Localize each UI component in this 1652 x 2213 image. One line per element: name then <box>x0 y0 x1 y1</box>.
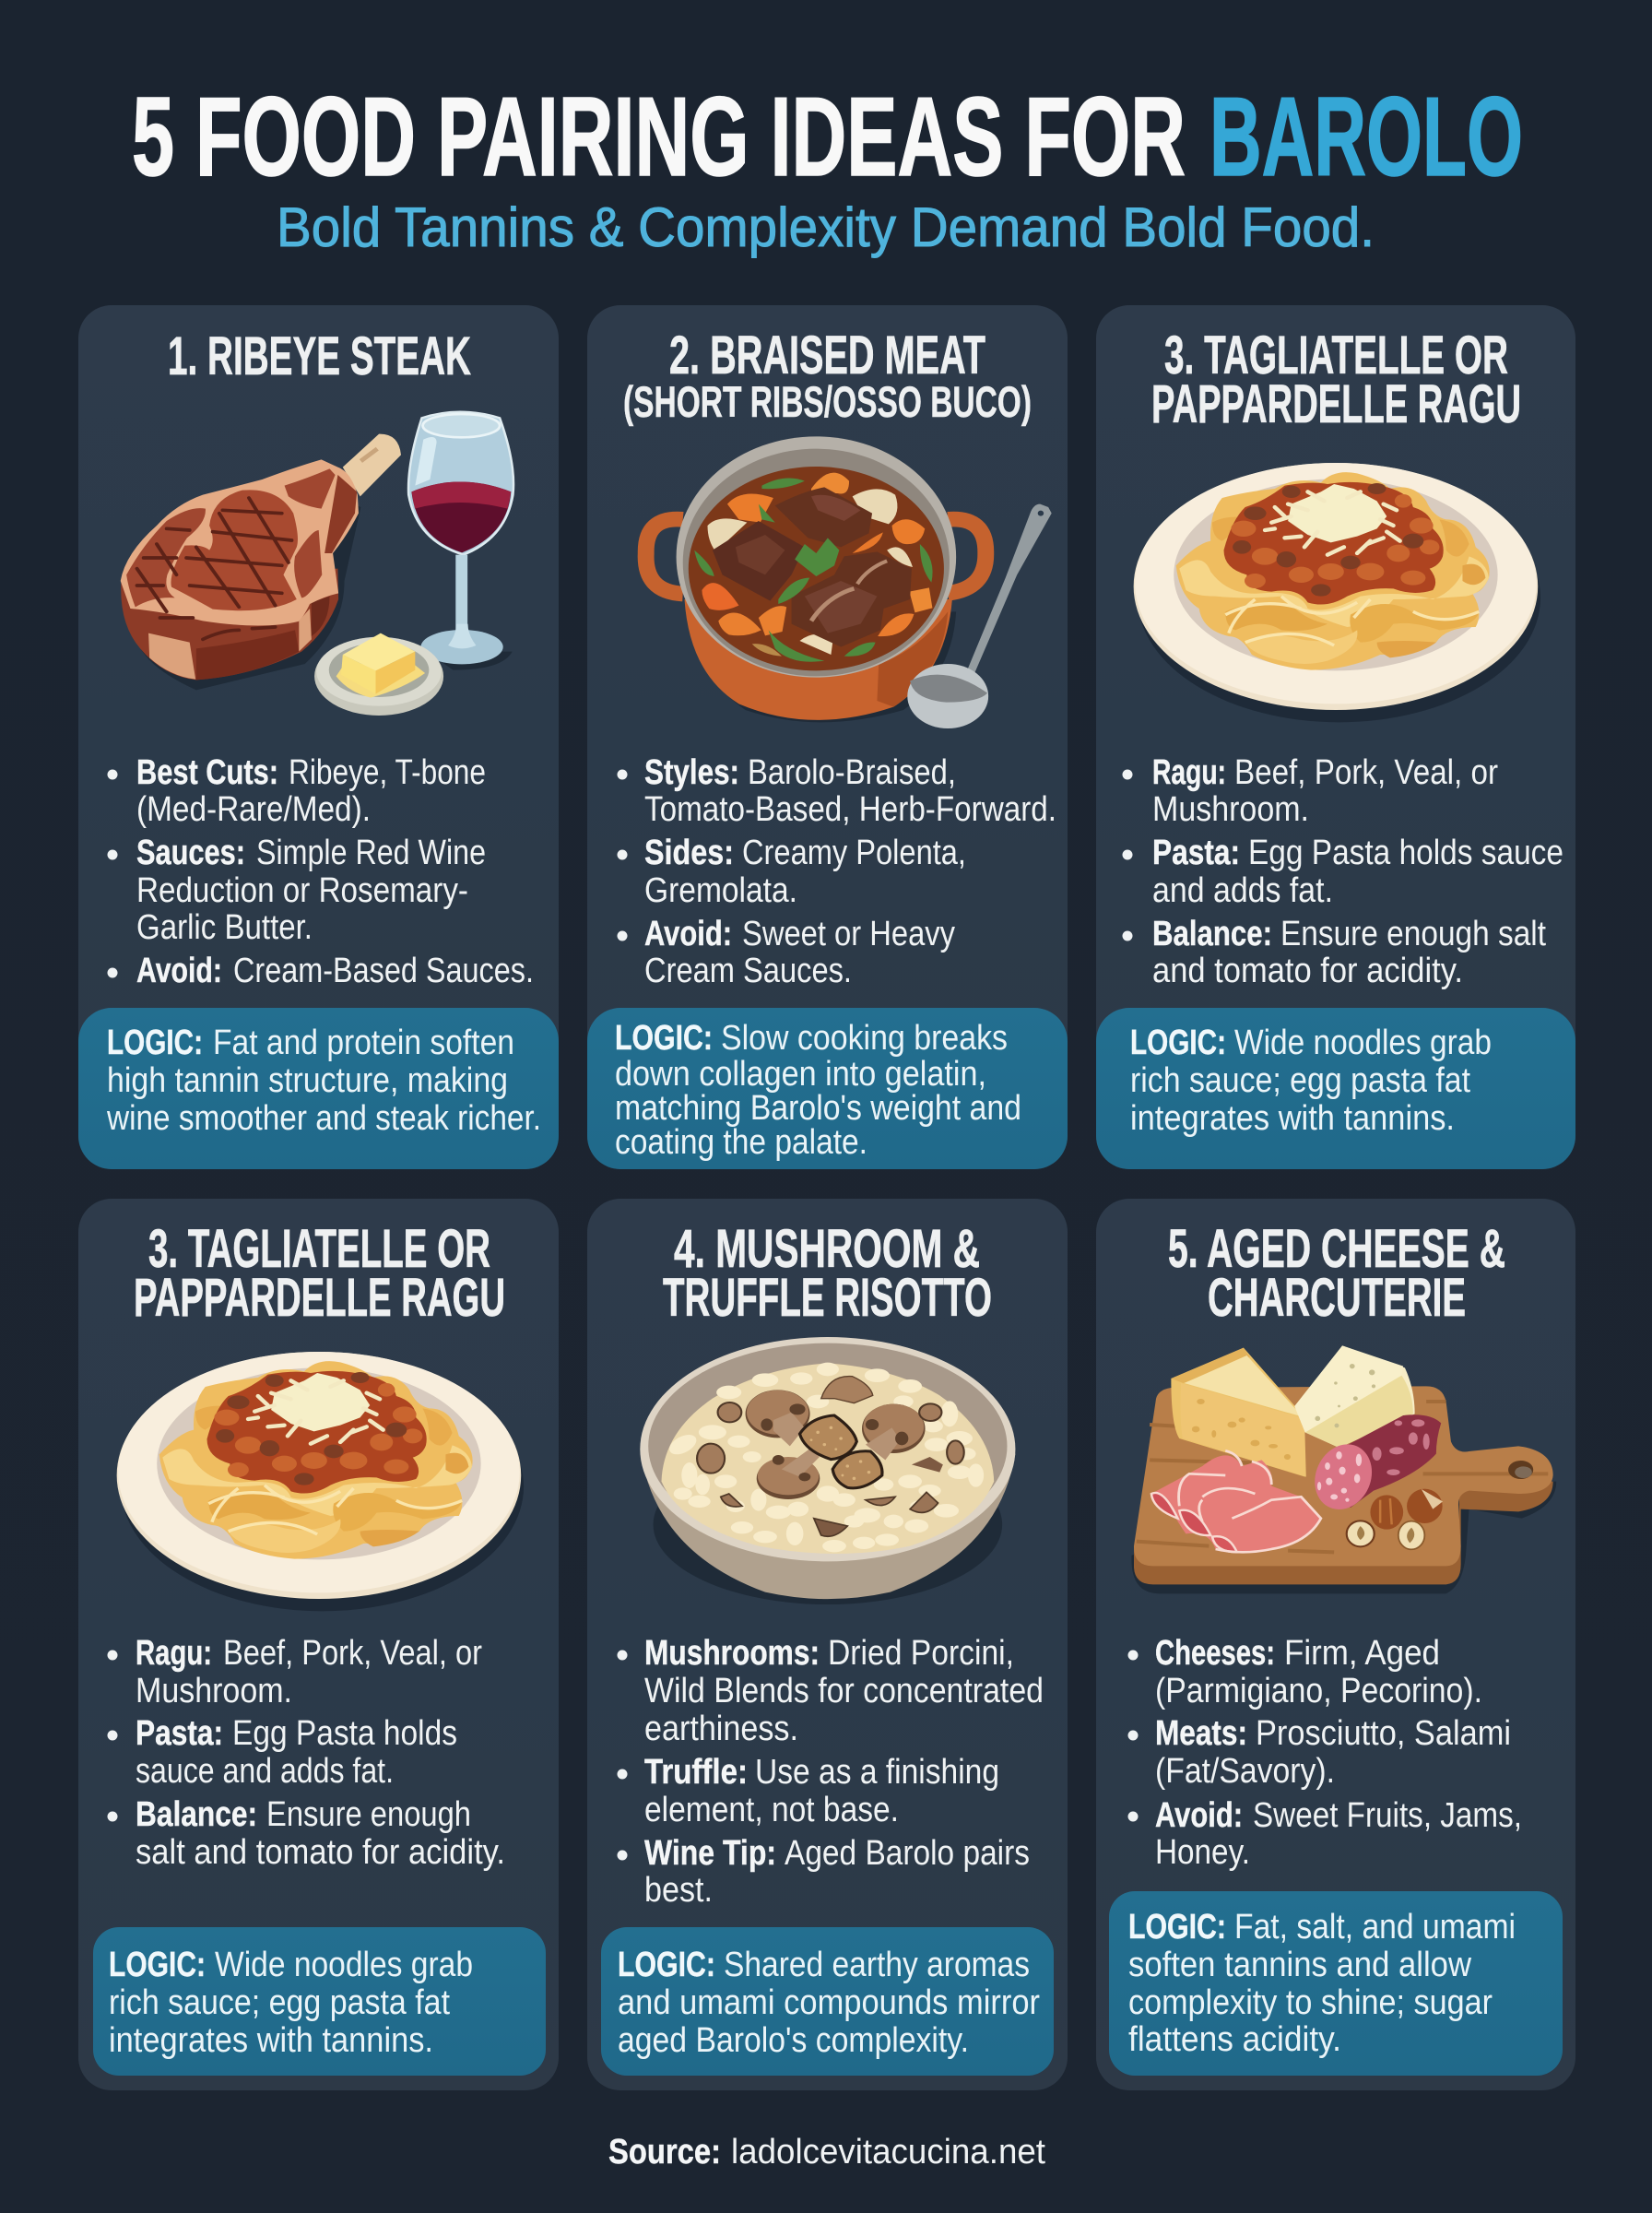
bullet list: ragu: and tomato for acidity. <box>1152 952 1463 990</box>
title: 5 FOOD PAIRING IDEAS FOR <box>132 74 1186 199</box>
bullet list: cheese: Firm, Aged <box>1284 1634 1440 1673</box>
bullet list: risotto: Aged Barolo pairs <box>785 1834 1030 1873</box>
bullet list: ribeye: Reduction or Rosemary- <box>136 871 468 910</box>
bullet list: braised: Creamy Polenta, <box>742 834 966 872</box>
heading: braised meat: 2. BRAISED MEAT <box>669 325 985 385</box>
logic callout: cheese: flattens acidity. <box>1128 2020 1341 2059</box>
logic callout: braised: matching Barolo's weight and <box>615 1089 1021 1128</box>
heading: braised meat: (SHORT RIBS/OSSO BUCO) <box>623 377 1032 426</box>
logic callout: ribeye: high tannin structure, making <box>107 1061 508 1100</box>
logic callout: ragu: Wide noodles grab <box>1234 1024 1492 1062</box>
bullet list: ragu: Balance: <box>1152 915 1272 953</box>
bullet list: cheese: Honey. <box>1155 1833 1250 1872</box>
bullet list: ribeye: Simple Red Wine <box>256 834 486 872</box>
bullet list: ragu: Balance: <box>136 1795 257 1834</box>
bullet list: risotto: Wine Tip: <box>644 1834 776 1873</box>
heading: ribeye steak: 1. RIBEYE STEAK <box>168 326 471 386</box>
illustration: braised pot and ladle <box>646 436 1052 728</box>
logic callout: risotto: and umami compounds mirror <box>618 1983 1040 2022</box>
bullet list: ribeye: Avoid: <box>136 952 222 990</box>
heading: tagliatelle ragu <box>1151 325 1521 434</box>
logic callout: braised: LOGIC: <box>615 1019 713 1058</box>
logic callout: cheese: soften tannins and allow <box>1128 1946 1471 1984</box>
bullet list: ragu: Ensure enough <box>266 1795 471 1834</box>
bullet list: cheese: Cheeses: <box>1155 1634 1275 1673</box>
heading: cheese and charcuterie: CHARCUTERIE <box>1208 1268 1466 1328</box>
logic callout: ribeye: wine smoother and steak richer. <box>106 1099 541 1138</box>
logic callout: cheese: complexity to shine; sugar <box>1128 1983 1493 2022</box>
bullet list: risotto: Dried Porcini, <box>828 1634 1014 1673</box>
bullet list: braised: Avoid: <box>644 915 732 953</box>
bullet list: braised: Barolo-Braised, <box>748 753 956 792</box>
illustration: pasta plate <box>1134 463 1540 722</box>
logic callout: ragu: integrates with tannins. <box>109 2021 433 2060</box>
bullet list: braised <box>618 753 1056 990</box>
heading: braised meat <box>623 325 1032 426</box>
bullet list: ragu: Ragu: <box>136 1634 212 1673</box>
bullet list: cheese: Avoid: <box>1155 1796 1243 1835</box>
bullet list: ribeye: Ribeye, T-bone <box>289 753 486 792</box>
bullet list: ragu: Ragu: <box>1152 753 1226 792</box>
heading: tagliatelle ragu: PAPPARDELLE RAGU <box>134 1268 505 1328</box>
bullet list: ribeye: Cream-Based Sauces. <box>233 952 534 990</box>
panel: cheese and charcuterie <box>1096 1199 1575 2090</box>
bullet list: braised: Sides: <box>644 834 734 872</box>
heading: cheese and charcuterie <box>1168 1219 1505 1328</box>
bullet list: ragu: Mushroom. <box>136 1672 292 1710</box>
logic callout: ragu <box>93 1927 546 2076</box>
bullet list: braised: Styles: <box>644 753 739 792</box>
bullet list: braised: Sweet or Heavy <box>742 915 955 953</box>
logic callout: risotto: Shared earthy aromas <box>724 1946 1030 1984</box>
logic callout: ragu: LOGIC: <box>109 1946 206 1984</box>
bullet list: ribeye: Sauces: <box>136 834 245 872</box>
bullet list: ragu: sauce and adds fat. <box>136 1752 394 1791</box>
bullet list: ribeye: Best Cuts: <box>136 753 278 792</box>
bullet list: risotto: element, not base. <box>644 1791 899 1829</box>
bullet list: cheese: Prosciutto, Salami <box>1256 1714 1511 1753</box>
panel: tagliatelle ragu (bottom) <box>78 1199 559 2090</box>
bullet list: risotto: Wild Blends for concentrated <box>644 1672 1044 1710</box>
bullet list: risotto: best. <box>644 1871 713 1910</box>
bullet list: ragu: Beef, Pork, Veal, or <box>223 1634 482 1673</box>
bullet list: cheese: (Parmigiano, Pecorino). <box>1155 1672 1482 1710</box>
logic callout: braised: down collagen into gelatin, <box>615 1055 986 1094</box>
bullet list: ribeye: Garlic Butter. <box>136 908 313 947</box>
bullet list: cheese: Meats: <box>1155 1714 1247 1753</box>
logic callout: ragu <box>1096 1008 1575 1169</box>
bullet list: cheese <box>1128 1634 1522 1872</box>
bullet list: ribeye <box>107 753 534 990</box>
bullet list: cheese: (Fat/Savory). <box>1155 1752 1335 1791</box>
bullet list: ribeye: (Med-Rare/Med). <box>136 790 371 829</box>
source line: Source: <box>608 2133 721 2172</box>
bullet list: risotto: Truffle: <box>644 1753 748 1792</box>
bullet list: ragu: Pasta: <box>136 1714 223 1753</box>
bullet list: ragu: Pasta: <box>1152 834 1240 872</box>
bullet list: risotto: earthiness. <box>644 1710 798 1748</box>
logic callout: ragu: LOGIC: <box>1130 1024 1226 1062</box>
subtitle: Bold Tannins & Complexity Demand Bold Food. <box>277 196 1375 258</box>
bullet list: ragu: Egg Pasta holds sauce <box>1248 834 1564 872</box>
heading: tagliatelle ragu <box>134 1219 505 1328</box>
logic callout: braised: coating the palate. <box>615 1123 867 1162</box>
logic callout: cheese: LOGIC: <box>1128 1908 1226 1947</box>
illustration: cheese board <box>1131 1345 1556 1593</box>
bullet list: risotto <box>618 1634 1044 1910</box>
logic callout: ragu: rich sauce; egg pasta fat <box>109 1983 450 2022</box>
bullet list: braised: Tomato-Based, Herb-Forward. <box>644 790 1056 829</box>
bullet list: ragu: Egg Pasta holds <box>232 1714 457 1753</box>
heading: mushroom risotto: 4. MUSHROOM & <box>674 1219 980 1279</box>
logic callout: risotto: aged Barolo's complexity. <box>618 2021 969 2060</box>
heading: tagliatelle ragu: 3. TAGLIATELLE OR <box>148 1219 490 1279</box>
logic callout: ragu: rich sauce; egg pasta fat <box>1130 1061 1470 1100</box>
logic callout: braised <box>587 1008 1068 1169</box>
bullet list: ragu: and adds fat. <box>1152 871 1333 910</box>
bullet list: risotto: Mushrooms: <box>644 1634 820 1673</box>
logic callout: risotto <box>601 1927 1054 2076</box>
bullet list: cheese: Sweet Fruits, Jams, <box>1253 1796 1522 1835</box>
panel: ribeye steak <box>78 305 559 1169</box>
bullet list: risotto: Use as a finishing <box>755 1753 999 1792</box>
panel: mushroom risotto <box>587 1199 1068 2090</box>
illustration: pasta plate <box>117 1352 524 1611</box>
logic callout: ragu: integrates with tannins. <box>1130 1099 1455 1138</box>
logic callout: cheese <box>1109 1891 1563 2076</box>
panel: tagliatelle ragu (top) <box>1096 305 1575 1169</box>
illustration: steak, wine and butter <box>121 412 513 716</box>
source line: ladolcevitacucina.net <box>731 2133 1045 2172</box>
logic callout: cheese: Fat, salt, and umami <box>1234 1908 1516 1947</box>
logic callout: ribeye: Fat and protein soften <box>213 1024 514 1062</box>
bullet list: ragu: salt and tomato for acidity. <box>136 1833 505 1872</box>
bullet list: braised: Gremolata. <box>644 871 797 910</box>
illustration: risotto bowl <box>640 1337 1015 1604</box>
logic callout: ribeye <box>78 1008 559 1169</box>
logic callout: braised: Slow cooking breaks <box>721 1019 1008 1058</box>
bullet list: ragu <box>1123 753 1564 990</box>
panel: braised meat <box>587 305 1068 1169</box>
heading: mushroom risotto: TRUFFLE RISOTTO <box>663 1268 992 1328</box>
logic callout: risotto: LOGIC: <box>618 1946 715 1984</box>
bullet list: braised: Cream Sauces. <box>644 952 852 990</box>
bullet list: ragu: Beef, Pork, Veal, or <box>1234 753 1498 792</box>
bullet list: ragu: Ensure enough salt <box>1280 915 1546 953</box>
heading: mushroom risotto <box>663 1219 992 1328</box>
logic callout: ragu: Wide noodles grab <box>215 1946 473 1984</box>
bullet list: ragu: Mushroom. <box>1152 790 1309 829</box>
bullet list: ragu <box>107 1634 505 1872</box>
logic callout: ribeye: LOGIC: <box>107 1024 203 1062</box>
